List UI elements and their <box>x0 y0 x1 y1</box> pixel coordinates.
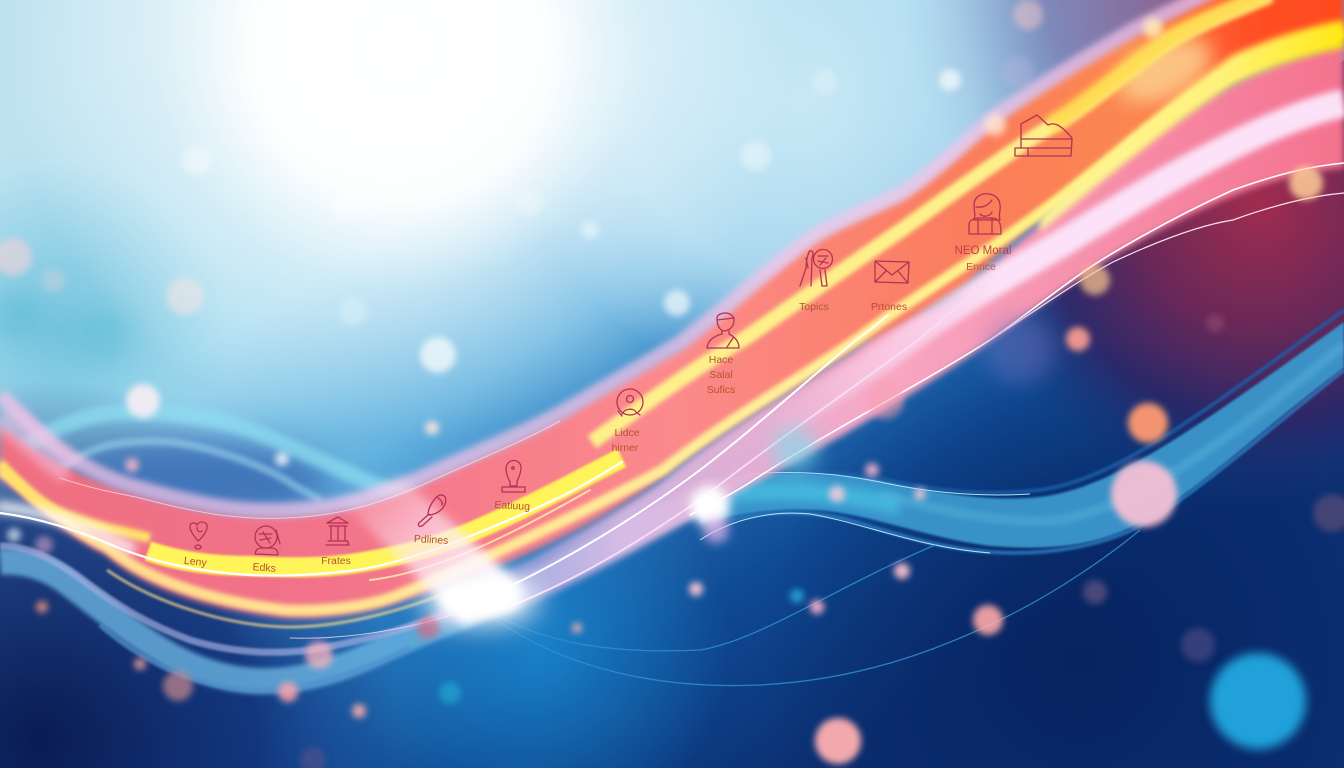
label: Lidce hirner: hirner <box>612 442 639 454</box>
icon: paddle key <box>418 495 446 526</box>
label: Leny: Leny <box>183 555 208 569</box>
icon: woman with headset <box>969 194 1001 234</box>
thick white-pink band <box>760 103 1344 440</box>
milestone: Pdlines <box>414 495 449 547</box>
milestone: Hace Salal Sufics <box>707 313 739 396</box>
pink-lilac upper ribbon edge <box>0 0 1215 518</box>
upper bright yellow ribbon with notches <box>0 0 1270 567</box>
milestone: Eatiuug <box>494 460 530 513</box>
icon: lens emblem <box>617 389 643 416</box>
label: Hace Salal Sufics: Hace <box>709 354 733 366</box>
label: Eatiuug: Eatiuug <box>494 499 530 513</box>
milestone: Edks <box>252 526 280 575</box>
label: Hace Salal Sufics <box>707 354 735 396</box>
label: Topics: Topics <box>799 301 829 313</box>
milestone: Topics <box>799 250 832 313</box>
blue ribbon upper left <box>0 412 430 500</box>
label: Lidce hirner <box>612 427 640 454</box>
soft bright spot on coral ribbon <box>1108 23 1222 117</box>
light streak and glows <box>340 316 1054 625</box>
lower yellow ribbon <box>0 20 1344 627</box>
milestone: NEO Moral Enrice <box>955 194 1011 273</box>
icon: portrait medallion <box>255 526 280 555</box>
white lines <box>0 163 1344 638</box>
milestone: summit chest icon <box>1015 115 1072 156</box>
icon: stamp pin <box>502 460 525 492</box>
label: NEO Moral Enrice: Enrice <box>966 261 996 273</box>
teal haze left <box>0 289 131 361</box>
milestone: Frates <box>321 517 351 567</box>
milestone: Lidce hirner <box>612 389 643 454</box>
icon: columned temple <box>326 517 349 545</box>
label: Hace Salal Sufics: Salal <box>709 369 733 381</box>
blush lower ribbon area <box>430 44 1344 628</box>
milestone: Prtones <box>871 261 909 313</box>
thin blue flow lines <box>470 530 1140 686</box>
label: Edks: Edks <box>252 561 276 575</box>
icon: person bust <box>707 313 739 348</box>
milestone: Leny <box>183 522 208 569</box>
label: NEO Moral Enrice: NEO Moral <box>955 245 1011 257</box>
label: Lidce hirner: Lidce <box>614 427 640 439</box>
icon: mountain on book <box>1015 115 1072 156</box>
label: NEO Moral Enrice <box>955 245 1011 273</box>
blue ribbon lower left <box>0 500 700 690</box>
blue ribbon right <box>700 310 1344 553</box>
icon: envelope <box>875 261 909 283</box>
large cyan bokeh orb <box>1210 653 1306 749</box>
label: Pdlines: Pdlines <box>414 533 449 547</box>
label: Prtones: Prtones <box>871 301 907 313</box>
icon: heart balloon <box>190 522 207 549</box>
label: Hace Salal Sufics: Sufics <box>707 384 735 396</box>
label: Frates: Frates <box>321 555 351 567</box>
icon: hand and magnifier <box>800 250 832 286</box>
